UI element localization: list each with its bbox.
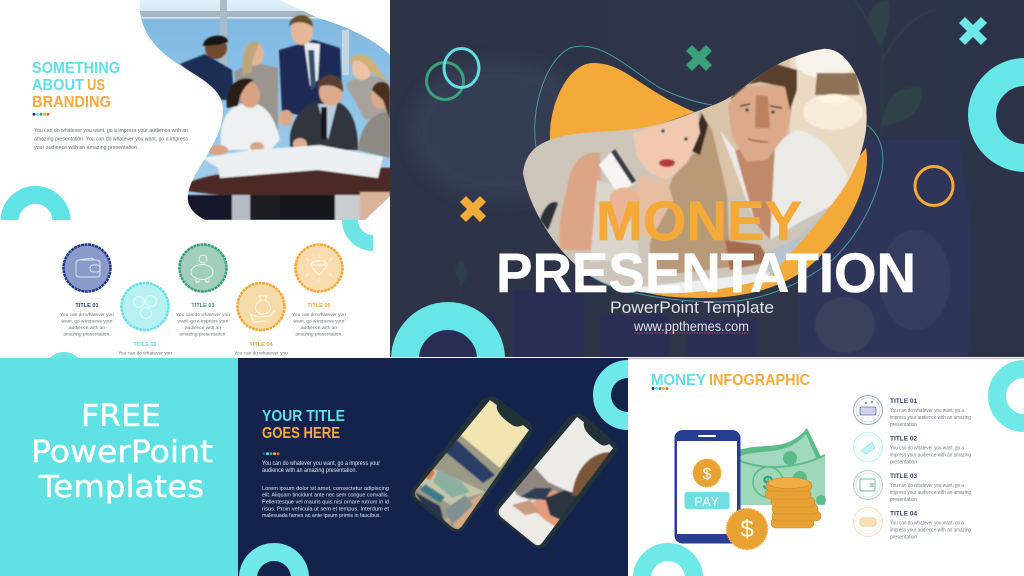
- heading: something about us branding: ABOUT: [32, 77, 84, 94]
- list item 01: TITLE 01: [890, 398, 917, 405]
- panel: five titles slide: [50, 220, 373, 358]
- thin teal outline: [535, 46, 883, 302]
- heading: your title goes here: [262, 408, 345, 442]
- text: title 01: want, go a impress your: [62, 318, 113, 324]
- list item 01: presentation: [890, 422, 917, 428]
- illustration: banknotes: $: [762, 473, 774, 495]
- background jar and coin stacks: [420, 0, 970, 357]
- heading: something about us branding: SOMETHING: [32, 60, 120, 77]
- ring: top right: [997, 369, 1024, 423]
- list item 03: You can do whatever you want, go a: [890, 483, 964, 489]
- panel: money infographic slide: [628, 357, 1024, 576]
- rings: interlocked teal and green: [426, 48, 479, 100]
- intro text: [262, 461, 380, 474]
- ring: bottom left: [0, 186, 70, 220]
- illustration: phone with pay screen: PAY: [694, 495, 720, 509]
- text: title 02: TITLE 02: [133, 342, 157, 348]
- text: title 03: audience with an: [185, 325, 221, 331]
- list item 03: presentation: [890, 497, 917, 503]
- text: title 01: You can do whatever you: [60, 312, 114, 318]
- text: title 04: You can do whatever you: [234, 350, 288, 356]
- text: title 01: amazing presentation.: [63, 332, 111, 338]
- icon: money bag: [238, 283, 284, 330]
- paragraph: amazing presentation. You can do whatever you want, go a impress: [34, 136, 188, 142]
- text: title 05: audience with an: [301, 325, 337, 331]
- list item 04: presentation: [890, 534, 917, 540]
- icon: diamond: [296, 244, 342, 292]
- list item 03: impress your audience with an amazing: [890, 490, 971, 496]
- list item 01: impress your audience with an amazing: [890, 415, 971, 421]
- list item 02: You can do whatever you want, go a: [890, 446, 964, 452]
- heading: money infographic: MONEY: [651, 372, 706, 389]
- list item 02: [854, 432, 971, 466]
- text: title 04: TITLE 04: [249, 342, 274, 348]
- colour dots: [32, 113, 50, 116]
- text: title 03: amazing presentation.: [179, 332, 227, 338]
- list item 02: TITLE 02: [890, 436, 917, 442]
- free powerpoint templates text: PowerPoint: [31, 435, 213, 470]
- ring: bottom peek: [50, 352, 78, 358]
- heading: your title goes here: YOUR TITLE: [262, 408, 345, 425]
- illustration: banknotes: [735, 428, 826, 505]
- text: title 05: TITLE 05: [307, 303, 331, 309]
- illustration: phone with pay screen: [674, 430, 740, 544]
- colour dots: [262, 452, 280, 455]
- title: money: MONEY: [596, 189, 802, 252]
- icon: wallet: [64, 244, 110, 292]
- intro text: audience with an amazing presentation.: [262, 468, 357, 474]
- list item 03: [854, 470, 971, 503]
- ring: top right corner: [342, 220, 373, 251]
- icon: green cross: [689, 48, 709, 68]
- ring: top right: [602, 369, 654, 421]
- icon: piggy bank: [180, 244, 226, 292]
- list item 02: impress your audience with an amazing: [890, 452, 971, 458]
- website url: www.ppthemes.com: [633, 318, 749, 334]
- text: title 03: [176, 303, 230, 338]
- text: title 01: TITLE 01: [75, 303, 99, 309]
- ring: bottom left: [248, 552, 300, 576]
- icon: coins: [122, 283, 168, 330]
- ring: bottom left: [642, 552, 694, 576]
- free powerpoint templates text: [31, 399, 213, 505]
- text: title 03: want, go a impress your: [178, 318, 229, 324]
- illustration: phone with pay screen: $: [703, 466, 712, 483]
- text: title 03: TITLE 03: [191, 303, 215, 309]
- heading: something about us branding: [32, 62, 120, 107]
- free powerpoint templates text: Templates: [38, 470, 204, 505]
- text: title 03: You can do whatever you: [176, 312, 230, 318]
- ring: orange: [915, 166, 953, 206]
- list item 04: TITLE 04: [890, 510, 917, 518]
- list item 02: presentation: [890, 460, 917, 466]
- icon: teal cross: [962, 20, 984, 42]
- phone: laptop and calculator: [405, 390, 540, 535]
- title: presentation: PRESENTATION: [496, 241, 916, 304]
- text: title 02: [118, 342, 172, 356]
- panel: money presentation hero: [390, 0, 1024, 357]
- paragraph: your audience with an amazing presentation: [34, 145, 137, 151]
- icon: orange cross: [463, 199, 483, 219]
- heading: money infographic: [651, 372, 810, 389]
- ring: large right: [982, 72, 1024, 158]
- text: title 01: [60, 303, 114, 338]
- lorem ipsum text: Lorem ipsum dolor sit amet, consectetur adipiscing: [262, 486, 389, 492]
- illustration: large coin: $: [740, 516, 754, 543]
- panel: about us slide: [0, 0, 390, 220]
- list item 04: impress your audience with an amazing: [890, 528, 971, 534]
- list item 01: [854, 396, 971, 428]
- lorem ipsum text: risus. Proin vehicula ut sem et tempus. Interdum et: [262, 506, 389, 512]
- text: title 04: [234, 342, 288, 356]
- couple photo: [515, 45, 875, 300]
- ring: large bottom left: [391, 302, 505, 357]
- free powerpoint templates text: FREE: [81, 399, 161, 434]
- list item 04: You can do whatever you want, go a: [890, 520, 964, 526]
- lorem ipsum text: Pellentesque vel mauris quis nisi ornare rutrum in id: [262, 500, 389, 506]
- intro text: You can do whatever you want, go a impress your: [262, 461, 380, 467]
- panel: free templates: [0, 358, 238, 576]
- colour dots: [652, 387, 668, 390]
- text: title 05: amazing presentation.: [295, 332, 343, 338]
- laptop screen glimpse: [768, 206, 830, 276]
- list item 04: [854, 508, 971, 540]
- heading: money infographic: INFOGRAPHIC: [709, 372, 810, 389]
- lorem ipsum text: [262, 486, 389, 519]
- heading: something about us branding: US: [87, 77, 105, 94]
- illustration: large coin: [726, 508, 768, 550]
- list item 03: TITLE 03: [890, 473, 917, 480]
- orange blob: [550, 63, 867, 298]
- illustration: coin stack: [765, 478, 821, 528]
- text: title 05: want, go a impress your: [294, 318, 345, 324]
- heading: your title goes here: GOES HERE: [262, 425, 340, 442]
- panel: your title slide: [238, 358, 654, 576]
- text: title 01: audience with an: [69, 325, 105, 331]
- paragraph: [34, 128, 188, 151]
- subtitle: PowerPoint Template: [610, 298, 774, 317]
- text: title 02: You can do whatever you: [118, 350, 172, 356]
- text: title 05: [292, 303, 346, 338]
- woman's hair: [650, 110, 730, 277]
- phone: woman at desk: [490, 410, 620, 550]
- lorem ipsum text: elit. Aliquam tincidunt ante nec sem congue convallis.: [262, 493, 389, 499]
- heading: something about us branding: BRANDING: [32, 94, 111, 111]
- lorem ipsum text: malesuada fames ac ante ipsum primis in faucibus.: [262, 513, 381, 519]
- list item 01: You can do whatever you want, go a: [890, 408, 964, 414]
- team meeting photo: [130, 0, 395, 220]
- paragraph: You can do whatever you want, go a impress your audience with an: [34, 128, 188, 134]
- text: title 05: You can do whatever you: [292, 312, 346, 318]
